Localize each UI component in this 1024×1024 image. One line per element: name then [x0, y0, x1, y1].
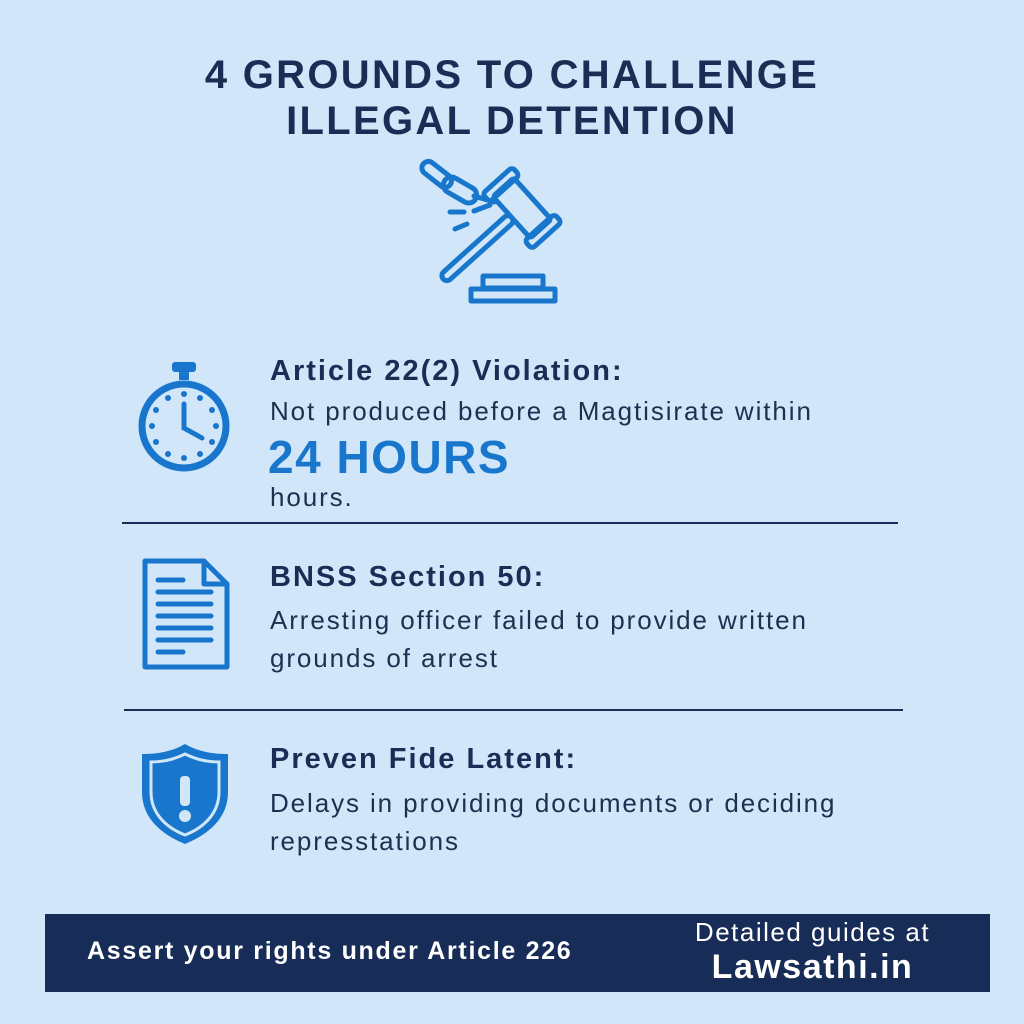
- section 3 text: [270, 788, 836, 856]
- section 1 text: Not produced before a Magtisirate within: [270, 396, 813, 426]
- section 2 heading: BNSS Section 50:: [270, 561, 545, 593]
- title: [205, 53, 819, 143]
- section 2 text: grounds of arrest: [270, 643, 499, 673]
- section 3 text: Delays in providing documents or deciding: [270, 788, 836, 818]
- title: 4 GROUNDS TO CHALLENGE: [205, 53, 819, 97]
- section 3 text: represstations: [270, 826, 460, 856]
- footer right text: [695, 917, 930, 986]
- footer right text: Lawsathi.in: [712, 948, 913, 986]
- footer left text: Assert your rights under Article 226: [87, 937, 572, 965]
- section 1 heading: Article 22(2) Violation:: [270, 355, 624, 387]
- icon: shield with exclamation: [142, 744, 228, 844]
- section 1 text end: hours.: [270, 482, 354, 512]
- icon: document: [142, 558, 230, 670]
- icon: gavel breaking chain: [419, 158, 562, 304]
- section 2 text: Arresting officer failed to provide written: [270, 605, 808, 635]
- footer right text: Detailed guides at: [695, 917, 930, 947]
- icon: stopwatch: [138, 362, 230, 472]
- section 3 heading: Preven Fide Latent:: [270, 743, 577, 775]
- highlight: 24 hours: 24 HOURS: [268, 431, 510, 483]
- footer banner: [45, 914, 990, 992]
- section 2 text: [270, 605, 808, 673]
- title: ILLEGAL DETENTION: [286, 99, 738, 143]
